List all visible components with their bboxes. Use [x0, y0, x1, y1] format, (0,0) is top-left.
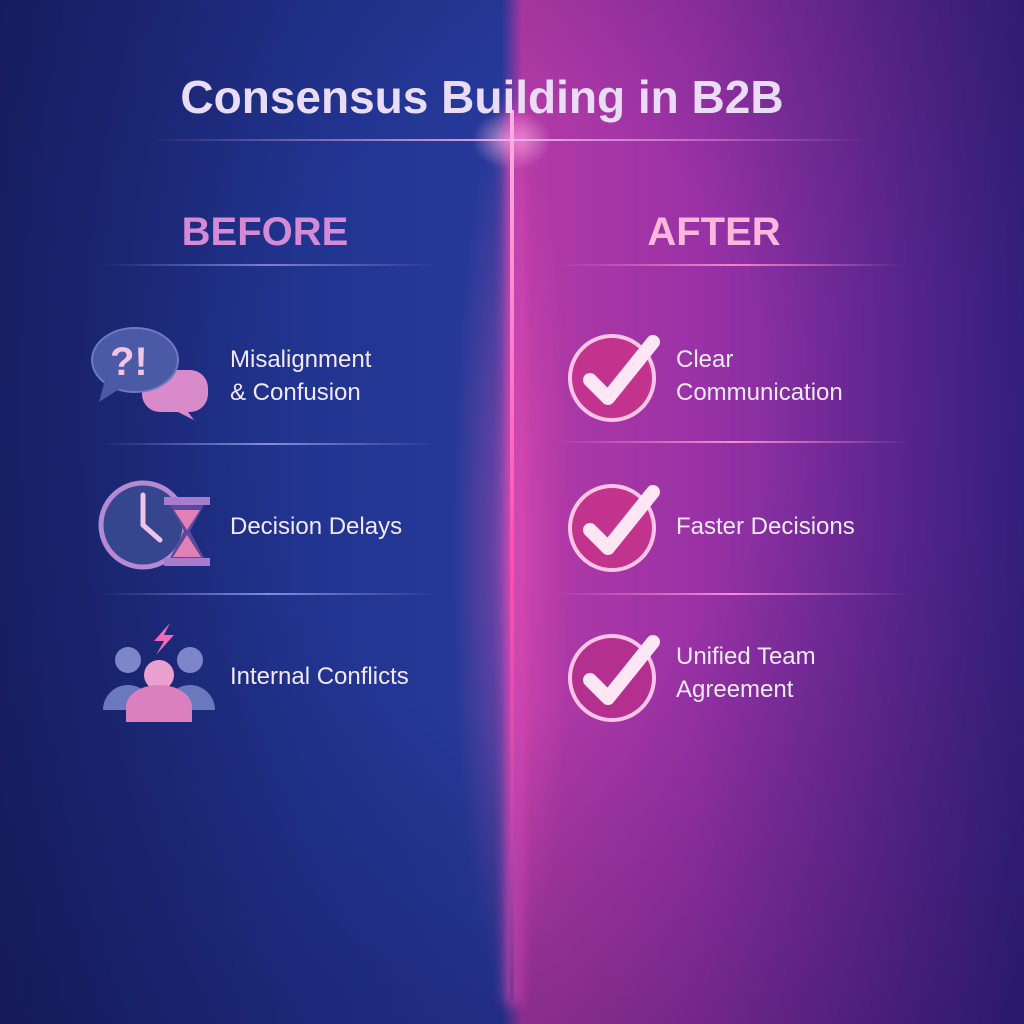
text: Unified Team Agreement	[676, 643, 816, 703]
text: Misalignment	[230, 346, 372, 406]
heading: BEFORE: BEFORE	[182, 210, 348, 254]
divider: vertical center line	[510, 110, 514, 1000]
text: Unified Team Agreement: Unified Team	[676, 643, 816, 670]
icon: speech bubbles	[91, 327, 208, 420]
text: Internal Conflicts: Internal Conflicts	[230, 663, 409, 690]
text: Misalignment: & Confusion	[230, 379, 361, 406]
text: Clear Communication	[676, 346, 843, 406]
heading: AFTER: AFTER	[647, 210, 781, 254]
text: Decision Delays: Decision Delays	[230, 513, 402, 540]
text: Clear Communication: Communication	[676, 379, 843, 406]
text: Clear Communication: Clear	[676, 346, 733, 373]
glow: center line	[452, 100, 572, 1000]
title: Consensus Building in B2B	[180, 71, 784, 123]
icon: check 3	[568, 634, 660, 722]
text: Unified Team Agreement: Agreement	[676, 676, 793, 703]
icon: people conflict	[103, 623, 215, 722]
icon: speech bubbles: ?!	[110, 340, 148, 384]
glow: top flare	[472, 110, 552, 170]
row dividers	[100, 443, 440, 445]
icon: check 2	[568, 484, 660, 572]
icon: check 1	[568, 334, 660, 422]
text: Misalignment: Misalignment	[230, 346, 371, 373]
icon: clock and hourglass	[98, 480, 210, 570]
text: Faster Decisions: Faster Decisions	[676, 513, 855, 540]
